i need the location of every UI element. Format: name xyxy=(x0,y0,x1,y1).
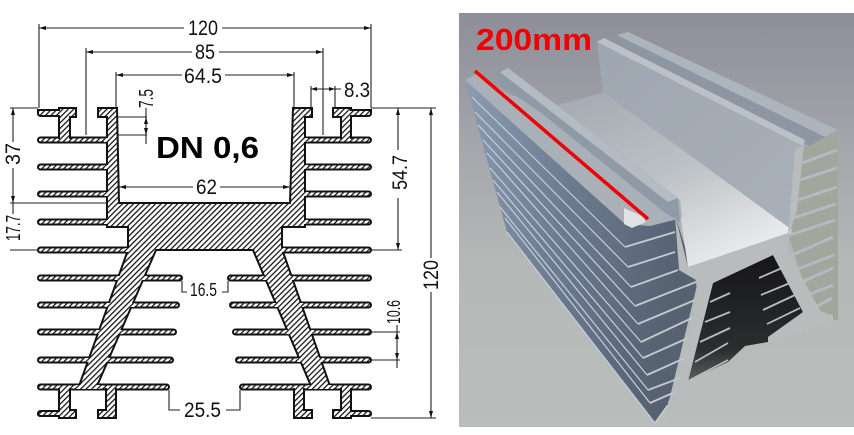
red measurement line xyxy=(475,71,648,219)
heatsink right wall xyxy=(597,42,803,232)
dimension labels: 64.5 xyxy=(184,65,222,88)
label: DN 0,6: DN 0,6 xyxy=(156,130,259,165)
dimension lines xyxy=(10,24,436,418)
label: 200mm: 200mm xyxy=(476,22,592,57)
profile: cooling fins xyxy=(38,138,371,390)
dimension labels: 17.7 xyxy=(3,215,25,241)
dimension labels: 25.5 xyxy=(184,399,221,422)
heatsink left fin side xyxy=(465,80,697,423)
dimension arrowheads xyxy=(11,26,433,418)
panel: photo of aluminium heatsink xyxy=(459,13,854,427)
dimension labels: 62 xyxy=(196,176,217,199)
dimension labels: 10.6 xyxy=(384,300,404,324)
dimension labels: 7.5 xyxy=(136,89,158,108)
profile: top and bottom flanges xyxy=(38,108,371,418)
profile: main hatched body xyxy=(79,108,330,386)
heatsink far rail xyxy=(597,32,838,152)
heatsink front face xyxy=(668,145,833,422)
dimension labels: 85 xyxy=(195,41,215,64)
heatsink inner fins xyxy=(688,268,800,381)
heatsink right fins xyxy=(788,130,838,320)
panel: technical drawing of heatsink profile xyxy=(38,108,371,418)
dimension labels: 120 xyxy=(420,260,443,290)
photo background xyxy=(459,13,854,427)
heatsink underside cavity xyxy=(688,255,803,381)
profile: fin-to-body joints xyxy=(60,136,350,392)
dimension labels: 120 xyxy=(188,17,218,40)
dimension labels: 16.5 xyxy=(190,280,217,300)
dimension labels xyxy=(2,17,443,422)
heatsink left rails xyxy=(465,68,682,228)
dimension labels: 8.3 xyxy=(344,79,370,102)
dimension labels: 54.7 xyxy=(389,155,412,190)
dimension labels: 37 xyxy=(2,143,25,165)
heatsink floor channel xyxy=(558,92,795,267)
